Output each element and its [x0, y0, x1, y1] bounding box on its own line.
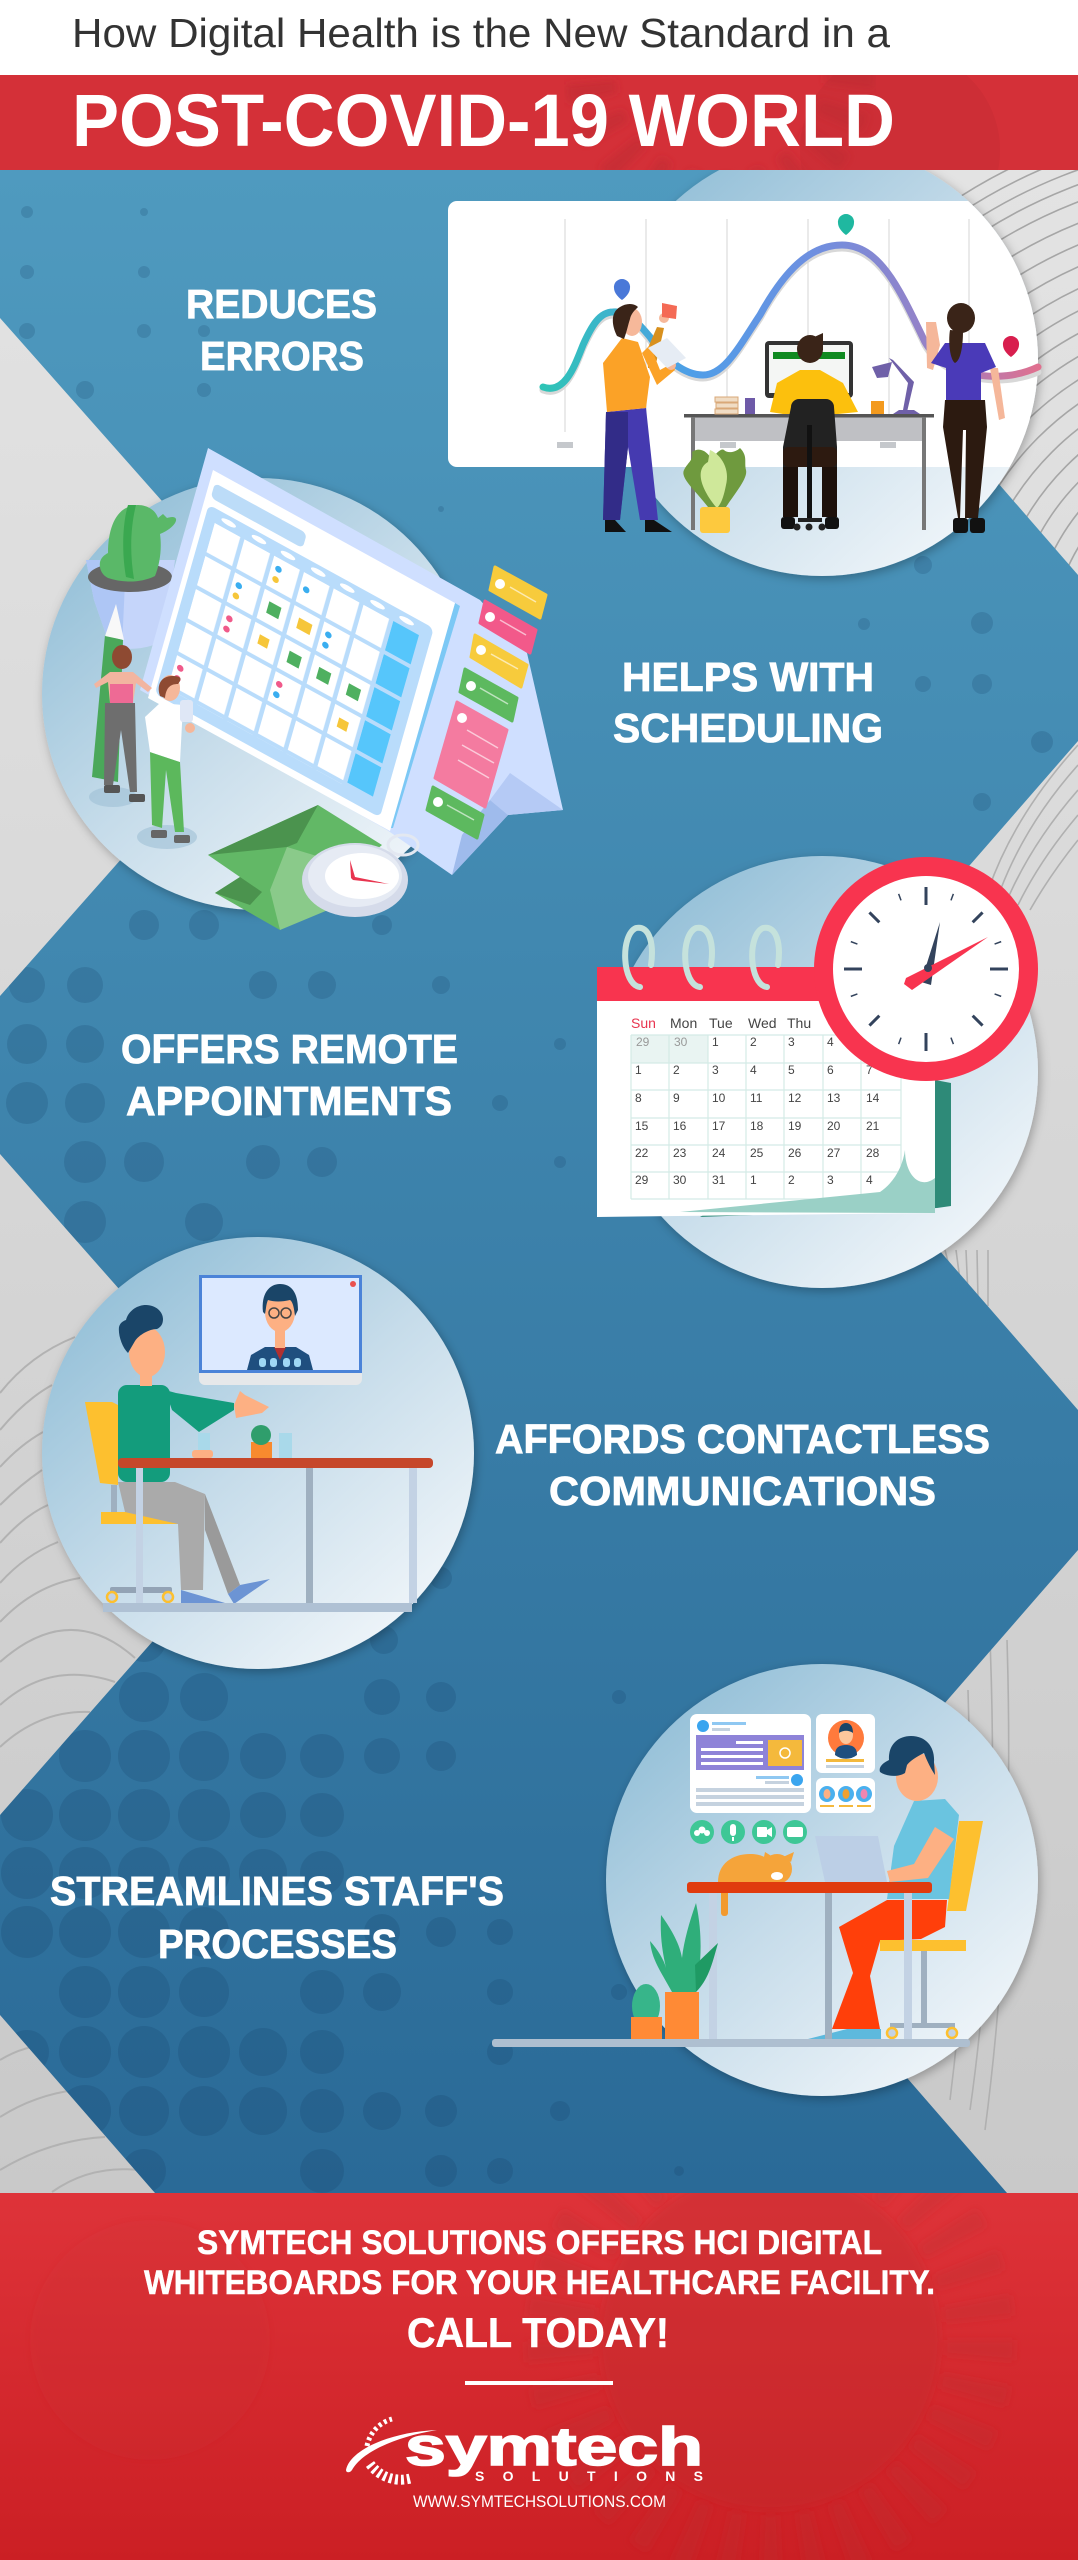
team card: [816, 1778, 875, 1813]
heading: offers remote appointments: APPOINTMENTS: [126, 1078, 452, 1124]
calendar grid: Sun: [631, 1015, 656, 1031]
man in white shirt: [137, 675, 197, 849]
logo swoosh: [346, 2430, 437, 2472]
heading: affords contactless communications: AFFORDS CONTACTLESS: [495, 1416, 990, 1462]
chart grid lines: [565, 219, 969, 432]
calendar grid: 26: [788, 1146, 802, 1160]
icon: blue map pin: [614, 279, 630, 300]
calendar grid: Wed: [748, 1015, 777, 1031]
heading: streamlines staff's processes: [50, 1868, 504, 1967]
calendar grid: 23: [673, 1146, 687, 1160]
calendar grid: 27: [827, 1146, 841, 1160]
calendar grid: 30: [674, 1035, 688, 1049]
calendar grid: Mon: [670, 1015, 697, 1031]
desk with items: [103, 1425, 433, 1612]
title: top line: How Digital Health is the New Standard in a: [72, 10, 890, 56]
icon: teal map pin: [838, 214, 854, 235]
call to action text: SYMTECH SOLUTIONS OFFERS HCI DIGITAL: [197, 2224, 882, 2262]
calendar grid: 22: [635, 1146, 649, 1160]
calendar grid: Thu: [787, 1015, 811, 1031]
calendar grid: 15: [635, 1119, 649, 1133]
calendar grid: 2: [673, 1063, 680, 1077]
heading: affords contactless communications: [495, 1416, 990, 1514]
calendar grid: 16: [673, 1119, 687, 1133]
heading: helps with scheduling: SCHEDULING: [613, 705, 883, 751]
icon: red map pin: [1003, 336, 1019, 357]
calendar screen: [148, 470, 455, 831]
circle backdrop: [606, 856, 1038, 1288]
back pages of wall calendar: [700, 1080, 951, 1217]
divider line: [465, 2381, 613, 2385]
symtech logo: [346, 2417, 703, 2484]
yellow office chair: [85, 1402, 178, 1602]
blue screen edge: [387, 603, 460, 828]
cactus in pot: [86, 505, 176, 649]
calendar grid: 8: [635, 1091, 642, 1105]
curling page corner: [680, 1150, 935, 1213]
woman in purple top: [926, 303, 1005, 533]
panel: streamlines staff processes illustration: [492, 1664, 1038, 2096]
heading: affords contactless communications: COMMUNICATIONS: [549, 1468, 936, 1514]
calendar grid: 4: [866, 1173, 873, 1187]
profile card: [816, 1714, 875, 1773]
calendar grid: 3: [827, 1173, 834, 1187]
virus texture: [346, 2193, 1006, 2478]
halftone dots on blue panel: [1, 206, 1053, 2193]
laptop: [815, 1836, 887, 1882]
symtech logo: SOLUTIONS: [475, 2468, 703, 2484]
green envelope: [208, 805, 382, 930]
heading: offers remote appointments: OFFERS REMOTE: [121, 1026, 458, 1072]
title: main line: POST-COVID-19 WORLD: [72, 79, 895, 162]
board side facets: [452, 773, 563, 875]
calendar grid: 12: [788, 1091, 802, 1105]
calendar grid: 21: [866, 1119, 880, 1133]
call to action text: [144, 2224, 935, 2356]
calendar grid: 4: [750, 1063, 757, 1077]
heading: offers remote appointments: [121, 1026, 458, 1124]
calendar grid: Tue: [709, 1015, 733, 1031]
whiteboard wall: [448, 201, 1040, 467]
heading: streamlines staff's processes: STREAMLINES STAFF'S: [50, 1868, 504, 1914]
calendar grid: 19: [788, 1119, 802, 1133]
calendar grid: 1: [712, 1035, 719, 1049]
logo wordmark: symtech: [405, 2417, 703, 2477]
man in orange shirt: [603, 303, 686, 532]
calendar grid: 29: [635, 1173, 649, 1187]
calendar grid: 5: [788, 1063, 795, 1077]
side tags: [427, 567, 546, 838]
orange cat: [718, 1852, 794, 1916]
heading: reduces errors: REDUCES: [186, 281, 377, 327]
calendar grid: 6: [827, 1063, 834, 1077]
calendar grid: 1: [635, 1063, 642, 1077]
website url: WWW.SYMTECHSOLUTIONS.COM: [413, 2492, 666, 2511]
calendar grid: 2: [750, 1035, 757, 1049]
heading: helps with scheduling: [613, 654, 883, 751]
chat card: [690, 1714, 811, 1813]
calendar grid: 9: [673, 1091, 680, 1105]
calendar page: [597, 1001, 935, 1217]
calendar grid: 3: [788, 1035, 795, 1049]
calendar grid: 29: [636, 1035, 650, 1049]
desk with monitor: [684, 341, 934, 530]
green pencil: [92, 604, 124, 782]
calendar grid: 24: [712, 1146, 726, 1160]
call to action panel: [0, 2193, 1078, 2560]
blue zigzag panel: [0, 170, 1078, 2193]
stopwatch: [302, 835, 418, 917]
calendar grid: 3: [712, 1063, 719, 1077]
calendar grid: [631, 1015, 901, 1199]
circle backdrop: [42, 1237, 474, 1669]
calendar grid: 13: [827, 1091, 841, 1105]
icon: call controls: [690, 1820, 807, 1844]
circle backdrop: [606, 144, 1038, 576]
calendar grid: 20: [827, 1119, 841, 1133]
circle backdrop: [42, 478, 474, 910]
call to action text: WHITEBOARDS FOR YOUR HEALTHCARE FACILITY.: [144, 2264, 935, 2302]
call to action text: CALL TODAY!: [407, 2309, 669, 2356]
potted plants: [631, 1903, 718, 2039]
seated person in yellow: [770, 333, 858, 530]
calendar grid: 30: [673, 1173, 687, 1187]
panel: offers remote appointments illustration: [597, 856, 1038, 1288]
calendar grid: 18: [750, 1119, 764, 1133]
heading: reduces errors: [186, 281, 377, 379]
calendar grid: 11: [750, 1091, 763, 1105]
red calendar header: [597, 967, 942, 1002]
circle backdrop: [606, 1664, 1038, 2096]
wall clock: [814, 857, 1038, 1081]
heading: helps with scheduling: HELPS WITH: [622, 654, 874, 700]
calendar board: [140, 448, 563, 875]
heading: reduces errors: ERRORS: [200, 333, 364, 379]
calendar grid: 31: [712, 1173, 726, 1187]
calendar grid: 14: [866, 1091, 880, 1105]
desk with floor bar: [492, 1882, 970, 2047]
woman in pink top: [89, 645, 152, 807]
video call monitor: [199, 1276, 362, 1385]
calendar binder rings: [625, 928, 779, 987]
calendar grid: 28: [866, 1146, 880, 1160]
calendar grid: 10: [712, 1091, 726, 1105]
axis ticks: [557, 442, 896, 448]
panel: reduces errors illustration: [448, 144, 1040, 576]
calendar grid: 17: [712, 1119, 726, 1133]
calendar grid: 4: [827, 1035, 834, 1049]
heading: streamlines staff's processes: PROCESSES: [158, 1921, 397, 1967]
potted plant: [683, 448, 746, 533]
seated man in green shirt: [118, 1305, 270, 1604]
panel: contactless communications illustration: [42, 1237, 474, 1669]
panel: helps with scheduling illustration: [42, 448, 563, 930]
title banner: [0, 75, 1078, 170]
calendar grid: 7: [866, 1063, 873, 1077]
calendar grid: 1: [750, 1173, 757, 1187]
line chart curve: [543, 245, 1038, 391]
calendar grid: 2: [788, 1173, 795, 1187]
calendar grid: 25: [750, 1146, 764, 1160]
seated man in blue shirt: [808, 1736, 983, 2039]
